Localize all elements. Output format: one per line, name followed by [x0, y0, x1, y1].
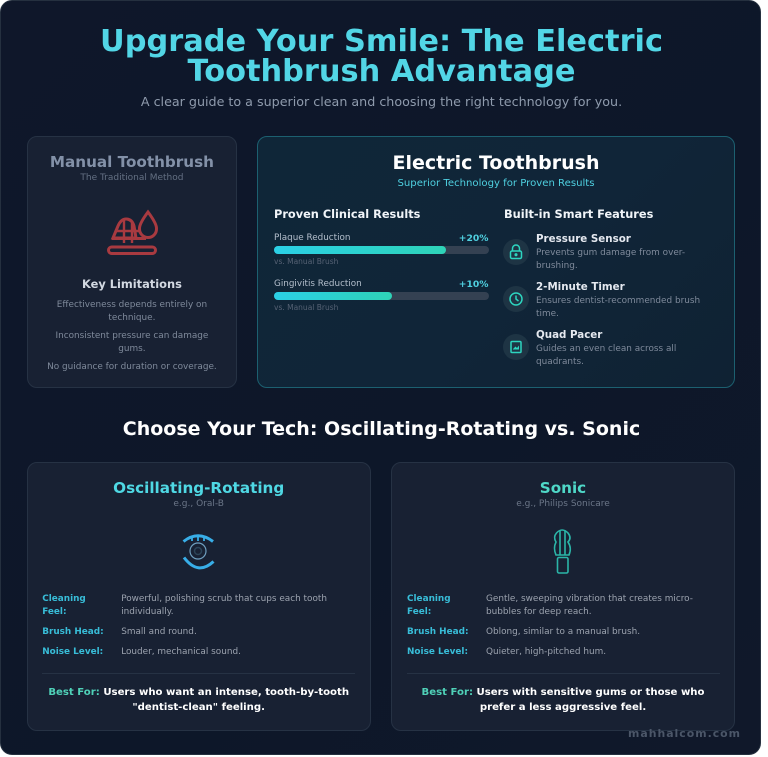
limitations list: Effectiveness depends entirely on: [57, 300, 207, 310]
electric heading: Electric Toothbrush: [393, 152, 599, 174]
feature: pressure sensor: Pressure Sensor: [536, 233, 631, 245]
sonic spec rows: Noise Level:: [407, 647, 468, 657]
oscillating best for: Best For: Users who want an intense, tooth-by-tooth: [48, 687, 349, 698]
sonic spec rows: Oblong, similar to a manual brush.: [486, 627, 640, 637]
sonic spec rows: Brush Head:: [407, 627, 468, 637]
icon: manual brush with drop: [107, 210, 158, 255]
feature: quad pacer: Guides an even clean across all: [536, 344, 676, 354]
manual heading: Manual Toothbrush: [50, 153, 214, 171]
oscillating spec rows: Brush Head:: [42, 627, 104, 637]
feature: timer: [503, 281, 700, 319]
icon: sonic brush head: [554, 529, 572, 574]
sonic spec rows: Gentle, sweeping vibration that creates micro-: [486, 594, 693, 604]
bar: gingivitis: +10%: [459, 279, 488, 290]
subtitle: A clear guide to a superior clean and choosing the right technology for you.: [141, 94, 622, 109]
watermark: mahhalcom.com: [628, 727, 741, 740]
feature: pressure sensor: Prevents gum damage from over-: [536, 248, 685, 258]
sonic spec rows: Feel:: [407, 607, 431, 617]
bar: gingivitis: [274, 279, 489, 312]
panel: manual toothbrush: [27, 136, 237, 388]
features heading: Built-in Smart Features: [504, 207, 653, 221]
oscillating best for: [48, 687, 349, 713]
feature: timer: Ensures dentist-recommended brush: [536, 296, 700, 306]
bar: gingivitis: vs. Manual Brush: [274, 303, 338, 312]
feature: pressure sensor: [503, 233, 685, 271]
oscillating heading: Oscillating-Rotating: [113, 479, 284, 497]
oscillating best for: "dentist-clean" feeling.: [132, 702, 265, 713]
feature: quad pacer: quadrants.: [536, 357, 584, 367]
bar: plaque: Plaque Reduction: [274, 233, 350, 243]
oscillating spec rows: Noise Level:: [42, 647, 103, 657]
icon: clock: [503, 286, 529, 312]
oscillating spec rows: Louder, mechanical sound.: [121, 647, 241, 657]
oscillating spec rows: Powerful, polishing scrub that cups each tooth: [121, 594, 327, 604]
bar: plaque: [274, 233, 489, 266]
oscillating example: e.g., Oral-B: [173, 499, 224, 509]
sonic spec rows: [407, 594, 693, 657]
sonic best for: Best For: Users with sensitive gums or those who: [422, 687, 704, 698]
icon: pacer: [503, 334, 529, 360]
title: Toothbrush Advantage: [188, 54, 575, 89]
sonic best for: prefer a less aggressive feel.: [480, 702, 646, 713]
limitations list: [47, 300, 217, 372]
oscillating spec rows: Cleaning: [42, 594, 86, 604]
sonic spec rows: bubbles for deep reach.: [486, 607, 592, 617]
feature: timer: time.: [536, 309, 559, 319]
title: [100, 24, 663, 89]
limitations list: technique. Inconsistent pressure can damage: [55, 313, 208, 341]
limitations list: gums. No guidance for duration or coverage.: [47, 344, 217, 372]
panel: sonic: [391, 462, 735, 731]
oscillating spec rows: Small and round.: [121, 627, 197, 637]
panel: oscillating-rotating: [27, 462, 371, 731]
feature: timer: 2-Minute Timer: [536, 281, 625, 293]
bar: gingivitis: Gingivitis Reduction: [274, 279, 362, 289]
feature: quad pacer: [503, 329, 676, 367]
bar: plaque: +20%: [459, 233, 488, 244]
oscillating spec rows: [42, 594, 327, 657]
sonic example: e.g., Philips Sonicare: [516, 499, 610, 509]
sonic spec rows: Quieter, high-pitched hum.: [486, 647, 606, 657]
sonic heading: Sonic: [540, 479, 586, 497]
panel: electric toothbrush: [257, 136, 735, 388]
electric subheading: Superior Technology for Proven Results: [398, 178, 594, 189]
bar: plaque: vs. Manual Brush: [274, 257, 338, 266]
sonic spec rows: Cleaning: [407, 594, 451, 604]
title: Upgrade Your Smile: The Electric: [100, 24, 663, 59]
key limitations: Key Limitations: [82, 277, 182, 291]
sonic divider: [407, 673, 720, 674]
section heading: Choose Your Tech: Oscillating-Rotating vs. Sonic: [123, 418, 640, 440]
icon: lock: [503, 239, 529, 265]
oscillating spec rows: individually.: [121, 607, 174, 617]
feature: pressure sensor: brushing.: [536, 261, 578, 271]
manual subheading: The Traditional Method: [80, 173, 183, 183]
oscillating divider: [42, 673, 355, 674]
sonic best for: [422, 687, 704, 713]
feature: quad pacer: Quad Pacer: [536, 329, 602, 341]
oscillating spec rows: Feel:: [42, 607, 67, 617]
icon: round brush head: [182, 534, 214, 570]
clinical results heading: Proven Clinical Results: [274, 207, 420, 221]
